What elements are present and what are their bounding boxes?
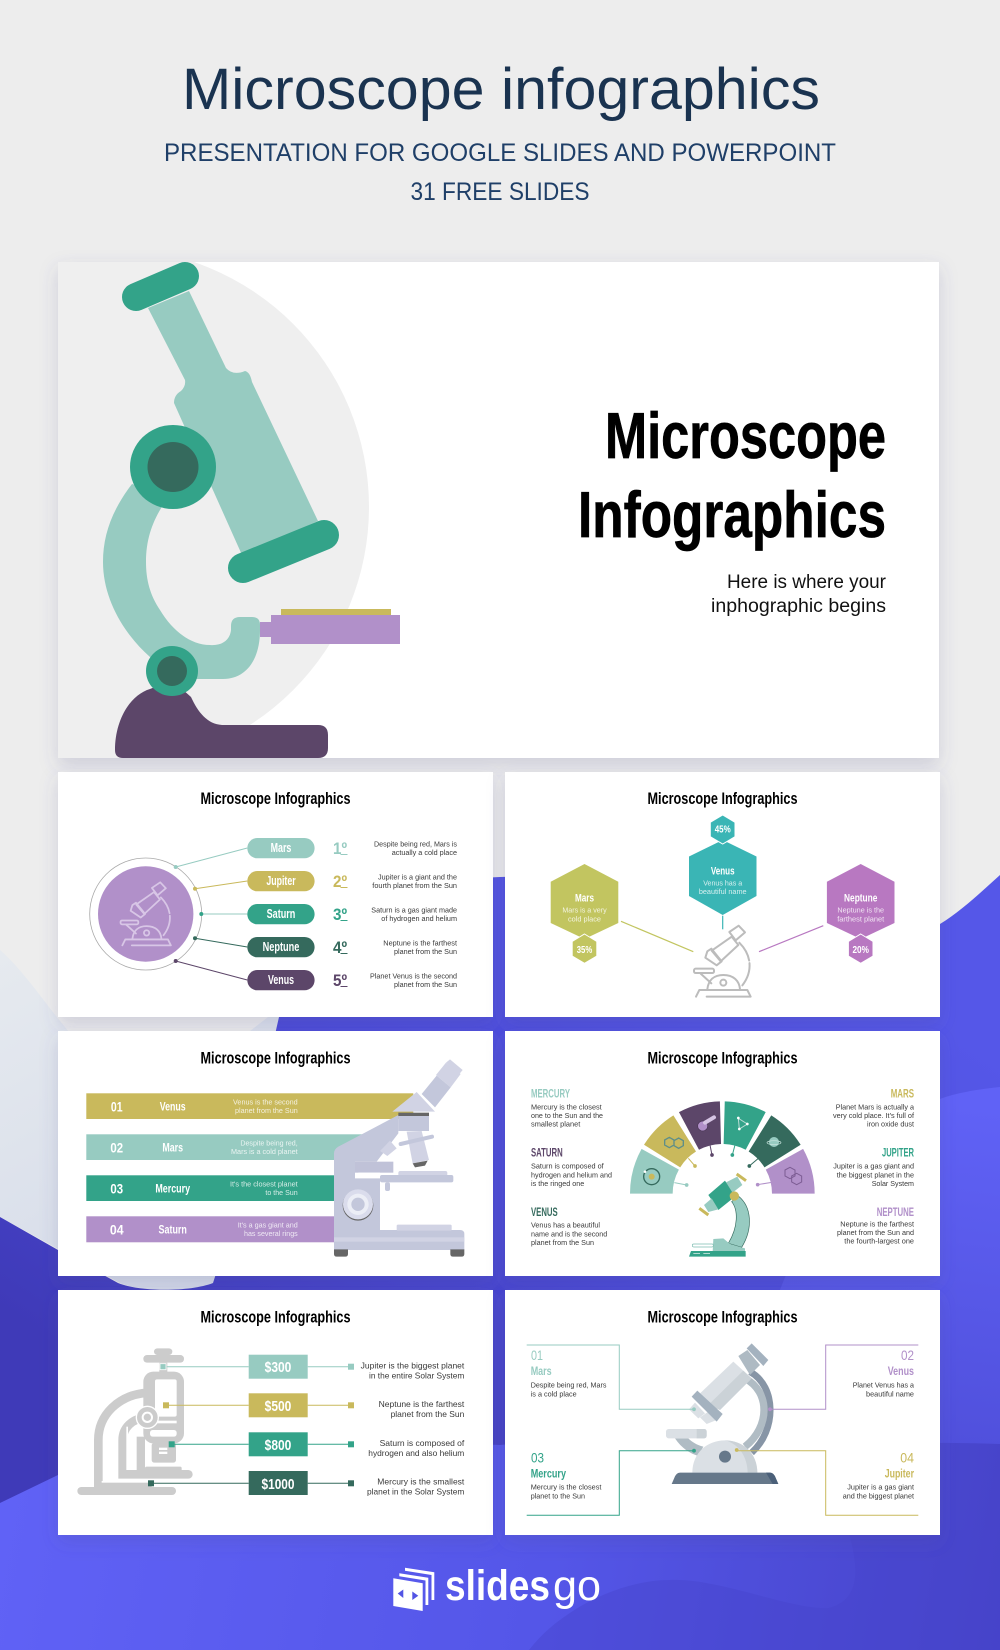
text: Neptune <box>837 1207 915 1246</box>
slide 2 title: Microscope Infographics <box>648 789 798 808</box>
descriptions: actually a cold place <box>392 848 457 857</box>
band: 04 Saturn <box>86 1216 336 1242</box>
pill: Saturn <box>247 904 315 924</box>
illustration: lavender microscope <box>334 1059 464 1257</box>
descriptions: Planet Venus is the second <box>370 972 457 980</box>
connector lines and dots <box>174 848 247 980</box>
descriptions: fourth planet from the Sun <box>372 881 457 890</box>
hexagon: Mars 35%: Mars is a very <box>562 906 607 915</box>
row: $1000 <box>148 1471 354 1495</box>
panel: slide 6 four callouts <box>505 1290 940 1535</box>
text: Saturn: SATURN <box>531 1148 563 1160</box>
text: Mercury: one to the Sun and the <box>531 1111 603 1120</box>
text: Saturn: is the ringed one <box>531 1179 584 1188</box>
text: Mercury: Mercury is the closest <box>531 1102 603 1111</box>
pill: Venus <box>247 970 315 990</box>
row: $1000: $1000 <box>262 1476 294 1493</box>
hexagon: Venus 45% <box>689 815 756 915</box>
hexagon: Neptune 20% <box>827 864 894 963</box>
text: Neptune: planet from the Sun and <box>837 1228 914 1237</box>
descriptions: Despite being red, Mars is <box>374 840 457 848</box>
row: $800 <box>169 1432 354 1456</box>
rank numbers: 4º <box>333 938 347 957</box>
pill: Neptune: Neptune <box>263 940 299 954</box>
callout: 02 Venus: Venus <box>888 1364 914 1378</box>
text: Mars: iron oxide dust <box>867 1120 915 1129</box>
callout: 03 Mercury: Mercury <box>531 1466 566 1480</box>
text: Jupiter: Solar System <box>872 1179 914 1188</box>
connector lines <box>621 916 823 952</box>
slide 6 title: Microscope Infographics <box>648 1307 798 1326</box>
band: 01 Venus: 01 <box>111 1098 123 1114</box>
callout: 04 Jupiter: and the biggest planet <box>843 1491 915 1500</box>
band: 01 Venus: planet from the Sun <box>235 1106 298 1115</box>
descriptions: of hydrogen and helium <box>381 914 457 923</box>
band: 03 Mercury: to the Sun <box>265 1188 298 1197</box>
row descriptions: in the entire Solar System <box>369 1370 464 1380</box>
callout: 01 Mars <box>527 1345 696 1411</box>
hexagon: Venus 45%: beautiful name <box>699 887 747 896</box>
callout: 03 Mercury: Mercury is the closest <box>531 1483 602 1492</box>
purple circle with microscope icon <box>90 858 202 970</box>
wordmark: slides <box>445 1562 550 1610</box>
hero title: Microscope <box>605 399 886 472</box>
pill: Jupiter <box>247 871 315 891</box>
panel: slide 3 banded list <box>58 1031 493 1276</box>
callout: 02 Venus: beautiful name <box>866 1389 914 1398</box>
pill: Venus: Venus <box>268 973 294 987</box>
text: Neptune: Neptune is the farthest <box>840 1219 915 1228</box>
illustration: teal microscope <box>689 1174 749 1257</box>
band: 02 Mars: 02 <box>110 1139 123 1155</box>
hexagon: Neptune 20%: farthest planet <box>837 915 884 924</box>
row descriptions: Jupiter is the biggest planet <box>361 1360 465 1370</box>
callout: 03 Mercury: planet to the Sun <box>531 1491 585 1500</box>
hexagon: Venus 45%: 45% <box>715 824 731 836</box>
text: Jupiter: the biggest planet in the <box>837 1170 914 1179</box>
text: Jupiter: JUPITER <box>882 1148 914 1160</box>
descriptions: Jupiter is a giant and the <box>378 872 457 882</box>
band: 02 Mars <box>86 1134 373 1160</box>
callout: 04 Jupiter: Jupiter is a gas giant <box>847 1483 915 1492</box>
pill: Mars <box>247 838 315 858</box>
band: 02 Mars: Despite being red, <box>240 1138 298 1147</box>
band: 03 Mercury: Mercury <box>155 1182 190 1196</box>
hexagon: Neptune 20%: Neptune is the <box>837 906 884 915</box>
wordmark: go <box>553 1562 601 1610</box>
callout: 03 Mercury <box>527 1449 696 1515</box>
logo: slidesgo <box>393 1562 601 1611</box>
descriptions: Saturn is a gas giant made <box>371 906 457 914</box>
text: Venus <box>531 1207 607 1247</box>
main title: Microscope infographics <box>182 57 820 122</box>
row: $300: $300 <box>265 1359 291 1376</box>
hexagon: Venus 45%: Venus has a <box>703 878 743 887</box>
panel: slide 2 hexagons <box>505 772 940 1017</box>
text: Mercury <box>531 1088 603 1129</box>
rank numbers: 5º <box>333 971 347 990</box>
text: Venus: VENUS <box>531 1207 558 1219</box>
illustration: large microscope <box>103 276 400 758</box>
row: $800: $800 <box>265 1437 291 1454</box>
callout: 01 Mars: Despite being red, Mars <box>531 1381 607 1390</box>
text: Venus: Venus has a beautiful <box>531 1221 600 1230</box>
hero subtitle: inphographic begins <box>711 596 886 617</box>
text: Jupiter: Jupiter is a gas giant and <box>833 1162 914 1171</box>
hexagon: Venus 45%: Venus <box>711 866 735 878</box>
text: Mercury: MERCURY <box>531 1088 570 1100</box>
hexagon: Mars 35%: Mars <box>575 893 594 905</box>
band: 01 Venus: Venus is the second <box>233 1097 298 1106</box>
row: $300 <box>160 1355 354 1379</box>
text: Mercury: smallest planet <box>531 1120 581 1129</box>
hexagon: Mars 35% <box>551 864 618 963</box>
callout: 01 Mars: Mars <box>531 1364 552 1378</box>
band: 02 Mars: Mars is a cold planet <box>231 1147 298 1156</box>
subtitle: PRESENTATION FOR GOOGLE SLIDES AND POWERPOINT <box>164 139 836 167</box>
rank numbers: 2º <box>333 872 347 891</box>
band: 01 Venus <box>86 1093 413 1119</box>
panel: hero slide <box>0 248 939 766</box>
descriptions <box>370 840 458 989</box>
row descriptions: Mercury is the smallest <box>377 1477 465 1487</box>
pill: Neptune <box>247 937 315 957</box>
fan chart with six segments <box>630 1101 815 1194</box>
text: Mars: very cold place. It's full of <box>833 1111 915 1120</box>
pill: Saturn: Saturn <box>267 907 295 921</box>
band: 03 Mercury <box>86 1175 336 1201</box>
text: Neptune: the fourth-largest one <box>844 1237 914 1246</box>
hexagon: Neptune 20%: 20% <box>852 944 869 956</box>
callout: 02 Venus <box>768 1345 918 1411</box>
illustration: grey microscope <box>77 1348 188 1495</box>
band: 04 Saturn: has several rings <box>244 1229 298 1238</box>
illustration: slate microscope <box>666 1343 778 1484</box>
callout: 03 Mercury: 03 <box>531 1450 544 1466</box>
hero title <box>578 399 886 551</box>
callout: 02 Venus: Planet Venus has a <box>853 1381 915 1390</box>
hero subtitle <box>711 572 887 617</box>
descriptions: planet from the Sun <box>394 947 457 956</box>
callout: 01 Mars: is a cold place <box>531 1389 577 1398</box>
hexagon: Mars 35%: 35% <box>577 944 593 956</box>
descriptions: Neptune is the farthest <box>383 938 458 948</box>
row: $500: $500 <box>265 1398 291 1415</box>
slide 5 title: Microscope Infographics <box>200 1307 350 1326</box>
hexagon: Neptune 20%: Neptune <box>844 893 877 905</box>
callout: 01 Mars: 01 <box>531 1347 543 1363</box>
callout: 02 Venus: 02 <box>901 1347 914 1363</box>
pill: Jupiter: Jupiter <box>266 874 296 888</box>
panel: slide 5 price list <box>58 1290 493 1535</box>
rank numbers: 3º <box>333 905 347 924</box>
text: Venus: name and is the second <box>531 1229 607 1238</box>
text: Mars: Planet Mars is actually a <box>836 1102 915 1111</box>
row: $500 <box>163 1393 354 1417</box>
row descriptions: Saturn is composed of <box>380 1438 465 1448</box>
row descriptions: Neptune is the farthest <box>379 1399 465 1409</box>
text: Venus: planet from the Sun <box>531 1238 594 1247</box>
band: 04 Saturn: It's a gas giant and <box>238 1220 298 1229</box>
callout: 04 Jupiter <box>735 1448 918 1515</box>
band: 03 Mercury: It's the closest planet <box>230 1179 298 1188</box>
text: Neptune: NEPTUNE <box>877 1207 914 1219</box>
text: Saturn: Saturn is composed of <box>531 1162 605 1171</box>
slide 1 title: Microscope Infographics <box>200 789 350 808</box>
row descriptions <box>361 1360 465 1497</box>
text: Saturn: hydrogen and helium and <box>531 1170 612 1179</box>
row descriptions: planet from the Sun <box>391 1409 465 1419</box>
band: 04 Saturn: 04 <box>110 1221 124 1237</box>
callout: 04 Jupiter: 04 <box>900 1450 914 1466</box>
slide count: 31 FREE SLIDES <box>410 178 590 206</box>
hexagon: Mars 35%: cold place <box>568 915 601 924</box>
descriptions: planet from the Sun <box>394 980 457 989</box>
band: 01 Venus: Venus <box>160 1100 186 1114</box>
band: 04 Saturn: Saturn <box>159 1223 187 1237</box>
hero title: Infographics <box>578 478 886 551</box>
icon: grey line microscope <box>694 926 751 997</box>
panel: slide 4 semicircle fan <box>505 1031 940 1276</box>
slide 3 title: Microscope Infographics <box>200 1048 350 1067</box>
row descriptions: hydrogen and also helium <box>368 1448 464 1458</box>
pill: Mars: Mars <box>271 841 291 855</box>
text: Saturn <box>531 1148 612 1188</box>
hero subtitle: Here is where your <box>727 572 887 593</box>
rank numbers: 1º <box>333 839 347 858</box>
text: Jupiter <box>833 1148 914 1188</box>
band: 02 Mars: Mars <box>162 1141 183 1155</box>
rank numbers <box>333 839 348 990</box>
row descriptions: planet in the Solar System <box>367 1487 464 1497</box>
slide 4 title: Microscope Infographics <box>648 1048 798 1067</box>
text: Mars <box>833 1088 915 1129</box>
text: Mars: MARS <box>891 1088 914 1100</box>
band: 03 Mercury: 03 <box>110 1180 123 1196</box>
callout: 04 Jupiter: Jupiter <box>885 1466 914 1480</box>
panel: slide 1 ranked list <box>58 772 493 1017</box>
icon: stacked slides <box>393 1568 434 1611</box>
